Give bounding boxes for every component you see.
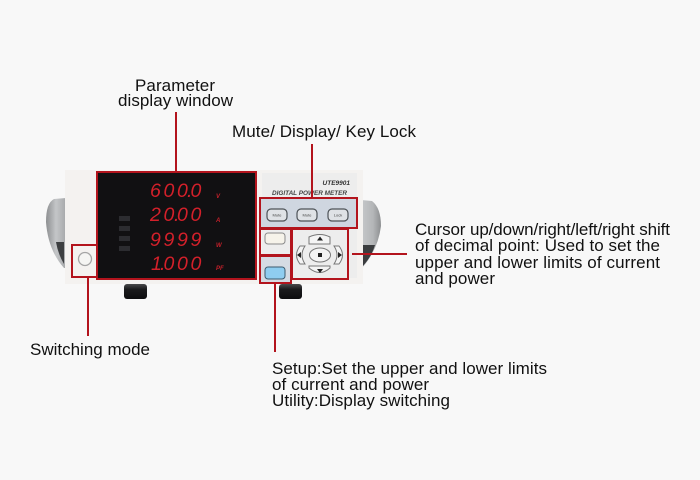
left handle dark recess xyxy=(56,242,64,264)
leader lines xyxy=(88,112,407,352)
setup key xyxy=(265,233,285,244)
unit labels: V xyxy=(216,194,221,200)
unit labels xyxy=(215,194,224,272)
label: cursor keys: Cursor up/down/right/left/right shift xyxy=(415,220,670,239)
left foot xyxy=(124,284,147,299)
display xyxy=(98,172,255,279)
label: parameter display window: display window xyxy=(118,91,234,110)
unit labels: W xyxy=(216,243,223,249)
model number: UTE9901 xyxy=(323,180,350,187)
key captions xyxy=(273,212,342,218)
label: parameter display window: Parameter xyxy=(135,76,215,95)
leader: setup and utility xyxy=(274,283,276,352)
power readout: 9999 xyxy=(150,229,202,251)
label: cursor keys: upper and lower limits of current xyxy=(415,253,660,272)
leader: switching mode xyxy=(87,277,89,336)
frame: setup key xyxy=(260,229,291,255)
label: setup and utility: of current and power xyxy=(272,375,429,394)
label: parameter display window xyxy=(118,76,234,110)
key strip xyxy=(261,199,356,227)
label: switching mode: Switching mode xyxy=(30,340,150,359)
frame: cursor keys xyxy=(292,229,348,279)
right handle xyxy=(361,200,381,268)
status indicators xyxy=(119,216,130,251)
label: mute display key lock: Mute/ Display/ Key Lock xyxy=(232,122,416,141)
right handle dark recess xyxy=(363,245,375,266)
device: power meter xyxy=(46,170,381,299)
body xyxy=(65,170,363,284)
mute, display and lock keys xyxy=(267,209,348,221)
unit labels: PF xyxy=(216,266,224,272)
frame: display window xyxy=(97,172,256,279)
frame: utility key xyxy=(260,256,291,283)
left handle xyxy=(46,198,66,268)
label: setup and utility: Setup:Set the upper and lower limits xyxy=(272,359,547,378)
key captions: Lock xyxy=(334,212,342,218)
frame: switching mode xyxy=(72,245,97,277)
voltage readout: 600.0 xyxy=(150,180,202,202)
label: setup and utility: Utility:Display switching xyxy=(272,391,450,410)
label: cursor keys: of decimal point: Used to set the xyxy=(415,236,660,255)
control panel xyxy=(262,173,357,278)
readouts xyxy=(149,180,202,275)
label: cursor keys xyxy=(415,220,670,288)
switching button xyxy=(78,252,92,266)
label: setup and utility xyxy=(272,359,547,410)
label: cursor keys: and power xyxy=(415,269,495,288)
utility key surround xyxy=(261,256,291,282)
meter name: DIGITAL POWER METER xyxy=(272,190,347,197)
leader: top keys xyxy=(311,144,313,198)
current readout: 20.00 xyxy=(149,204,202,226)
key captions: Mute xyxy=(303,212,312,218)
utility key xyxy=(265,267,285,279)
right foot xyxy=(279,284,302,299)
cursor key glyphs xyxy=(297,236,342,273)
power factor readout: 1.000 xyxy=(151,253,202,275)
leader: display window xyxy=(175,112,177,172)
key captions: Mute xyxy=(273,212,282,218)
red callout frames xyxy=(72,172,357,283)
frame: top keys xyxy=(260,198,357,228)
unit labels: A xyxy=(215,218,220,224)
leader: cursor keys xyxy=(352,253,407,255)
cursor keys xyxy=(296,234,342,272)
